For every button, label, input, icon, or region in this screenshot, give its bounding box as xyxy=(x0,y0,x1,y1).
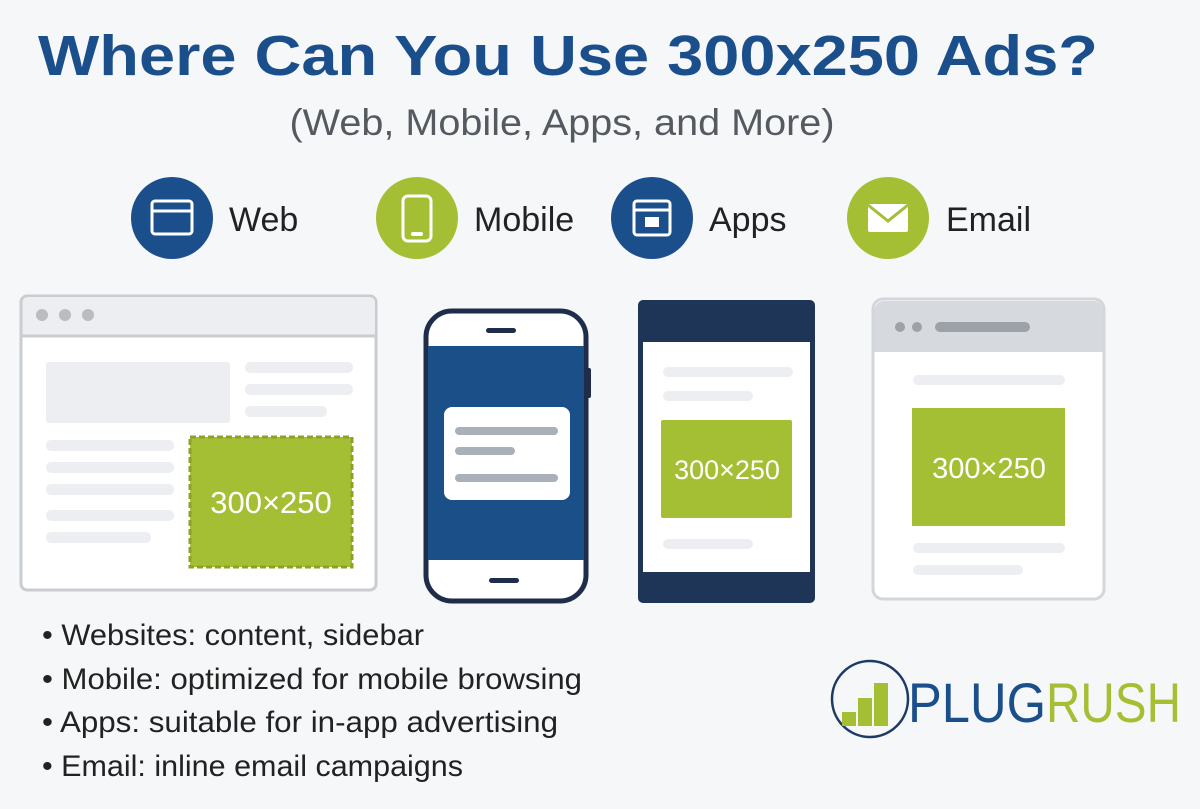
mockup: app xyxy=(638,300,815,603)
ad: email 300x250: 300×250 xyxy=(932,453,1046,485)
ad: email 300x250 xyxy=(912,408,1065,526)
category: apps: Apps xyxy=(709,201,786,239)
category: web: Web xyxy=(229,201,298,239)
ad: app 300x250: 300×250 xyxy=(674,455,780,485)
category: mobile xyxy=(376,177,574,259)
title: Where Can You Use 300x250 Ads? xyxy=(38,24,1098,88)
ad: web 300x250 xyxy=(190,437,352,567)
category: email xyxy=(847,177,1031,259)
mockup: mobile phone xyxy=(426,311,591,601)
bullet list xyxy=(42,619,582,783)
logo: PlugRush: RUSH xyxy=(1046,671,1181,734)
category: apps xyxy=(611,177,786,259)
logo: PlugRush: PLUG xyxy=(908,671,1046,734)
category: email: Email xyxy=(946,201,1031,239)
bullet list: • Apps: suitable for in-app advertising xyxy=(42,706,558,739)
subtitle: (Web, Mobile, Apps, and More) xyxy=(290,102,834,143)
ad: app 300x250 xyxy=(661,420,792,518)
mockup: email xyxy=(873,299,1104,599)
bullet list: • Email: inline email campaigns xyxy=(42,750,463,783)
category: mobile: Mobile xyxy=(474,201,574,239)
category: web xyxy=(131,177,298,259)
mockup: web browser xyxy=(21,296,376,590)
ad: web 300x250: 300×250 xyxy=(210,485,332,520)
bullet list: • Mobile: optimized for mobile browsing xyxy=(42,663,582,696)
bullet list: • Websites: content, sidebar xyxy=(42,619,424,652)
logo: PlugRush xyxy=(832,661,1181,737)
